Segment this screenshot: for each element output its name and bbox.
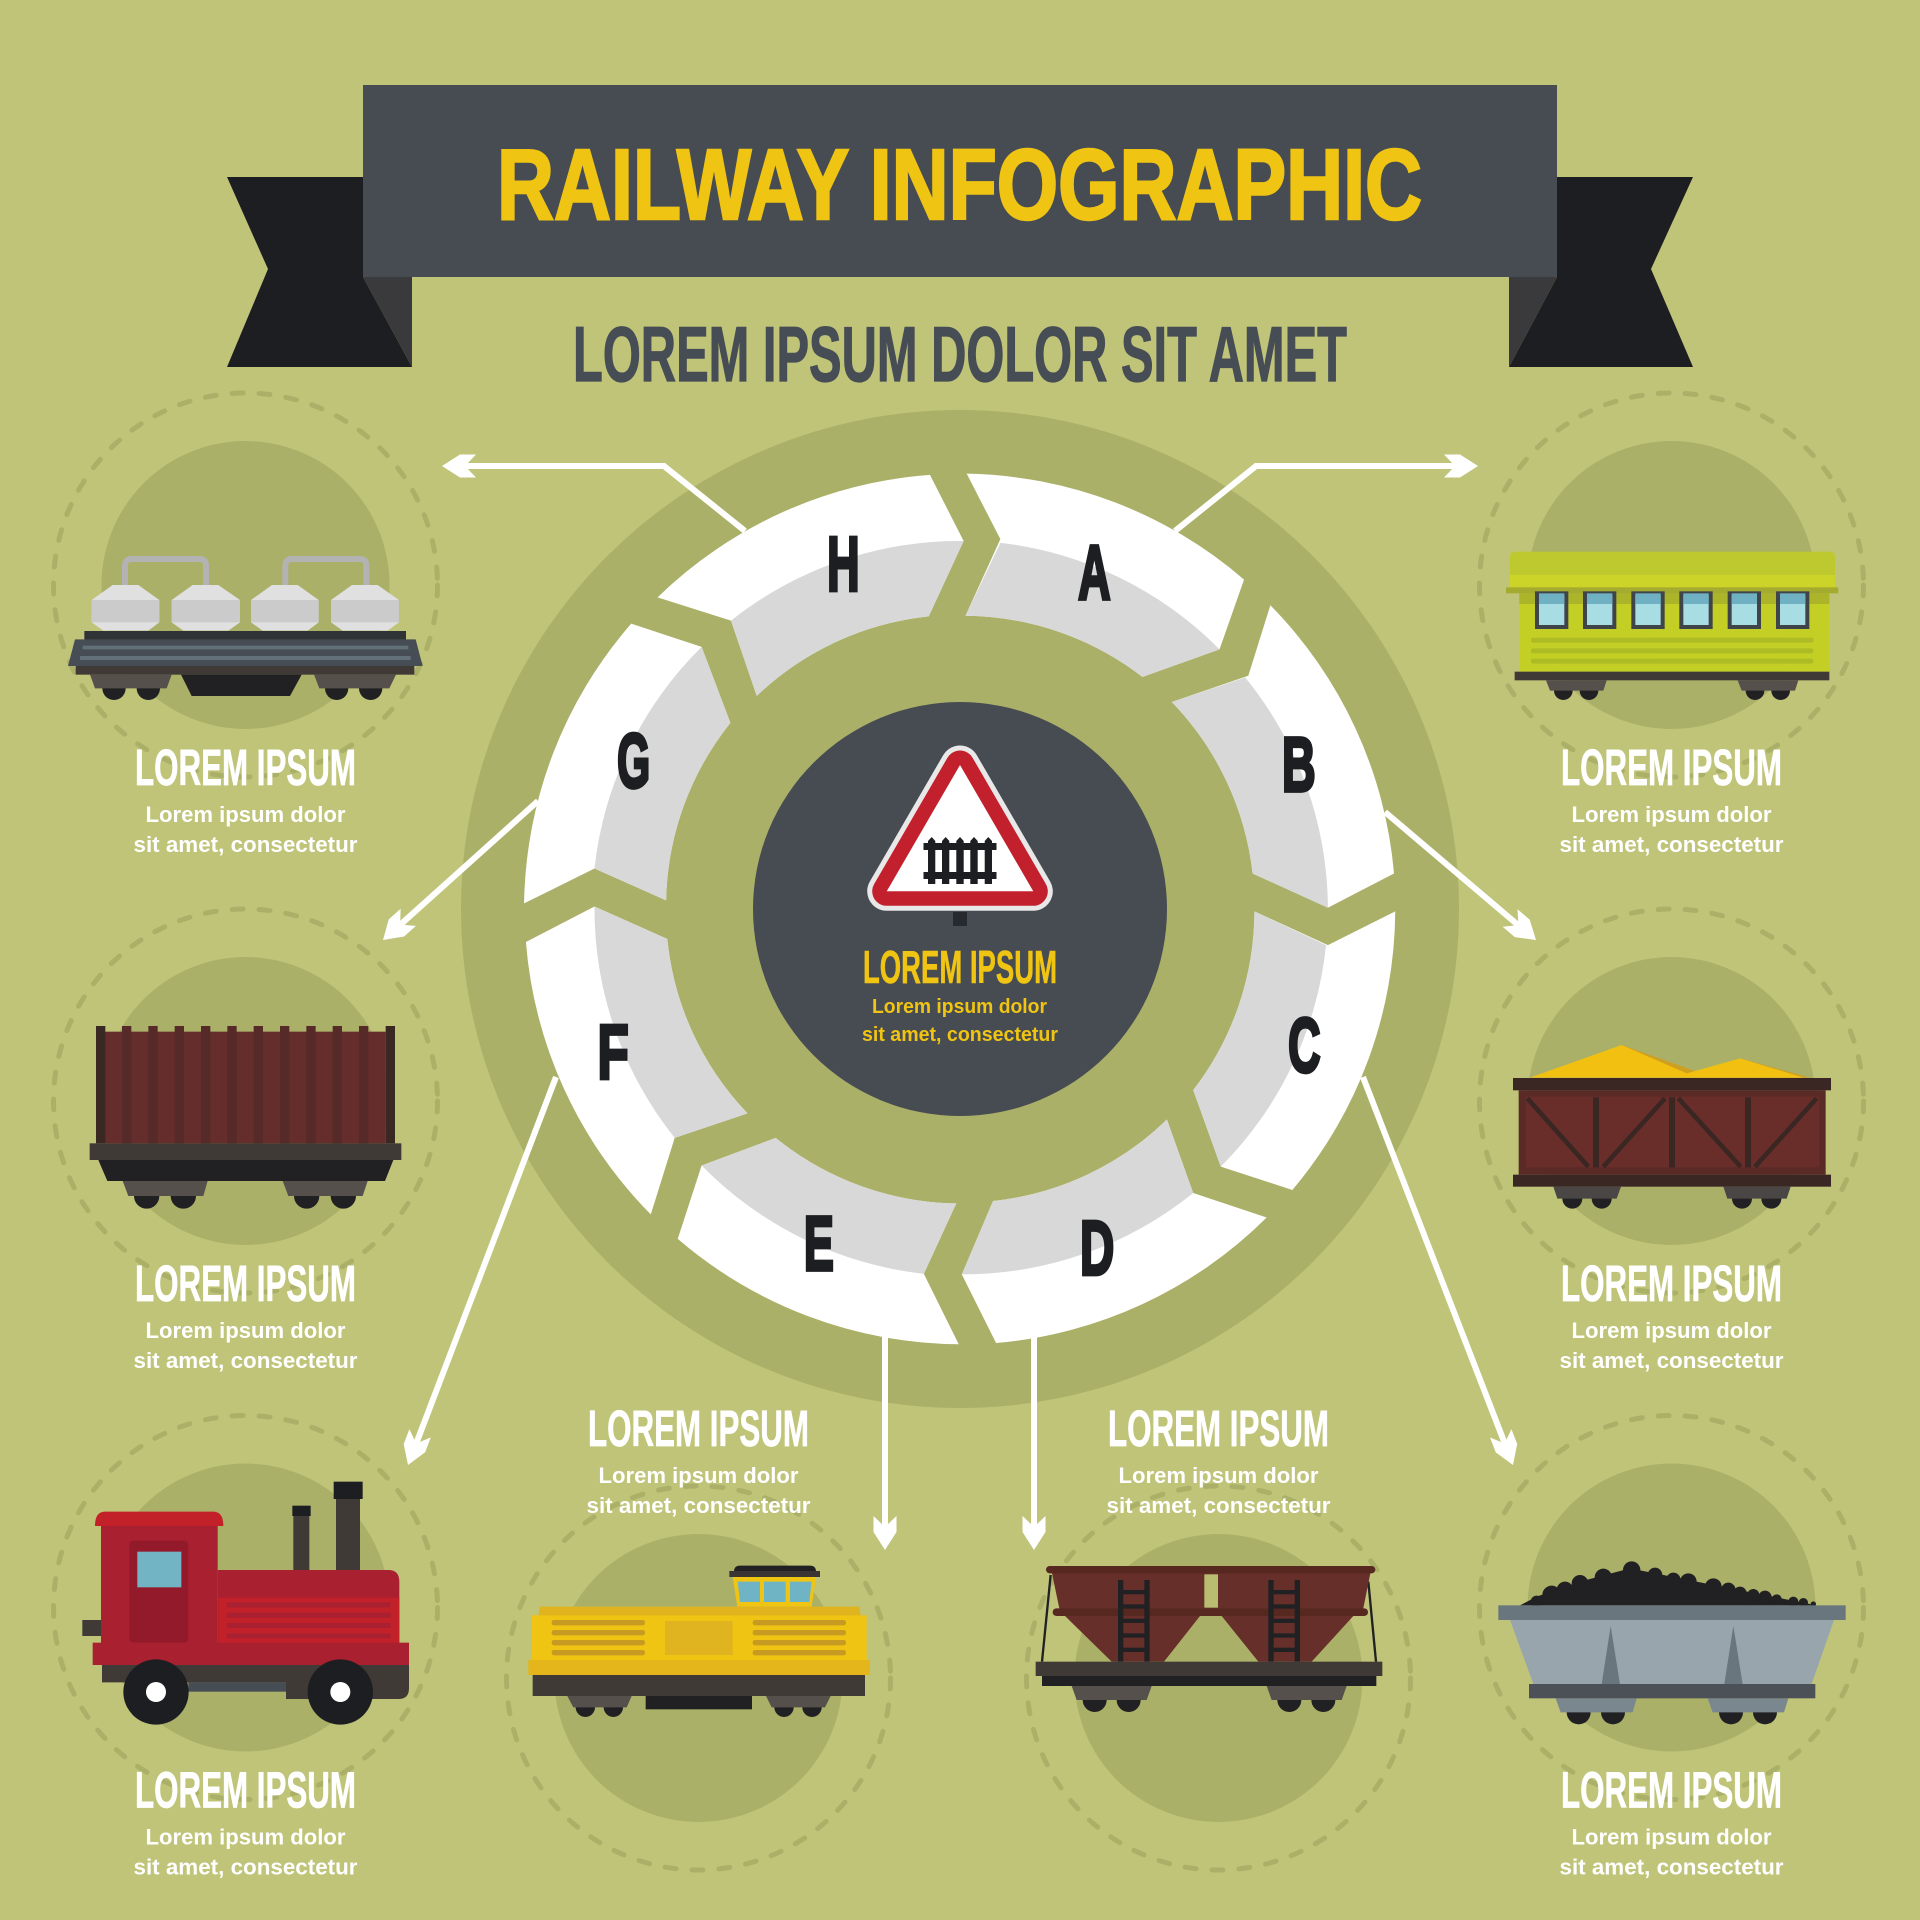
icon: hopper wagon — [1036, 1566, 1382, 1712]
segment H: H — [827, 522, 860, 608]
arrow: E — [874, 1335, 896, 1550]
text: sit amet, consectetur — [134, 1348, 358, 1373]
panel: C coal wagon — [1480, 1416, 1864, 1880]
arrow: B — [1385, 812, 1543, 949]
panel: G gondola wagon — [54, 909, 438, 1373]
banner body — [363, 85, 1557, 277]
segment C: C — [1288, 1003, 1321, 1089]
text — [586, 1463, 811, 1518]
arrow: H — [442, 454, 745, 531]
icon: coal wagon — [1498, 1561, 1846, 1724]
text: sit amet, consectetur — [586, 1493, 811, 1518]
text — [1560, 1318, 1784, 1373]
segment G: G — [617, 719, 650, 805]
label: LOREM IPSUM — [588, 1400, 809, 1457]
label: LOREM IPSUM — [135, 739, 356, 796]
title: RAILWAY INFOGRAPHIC — [497, 129, 1422, 241]
segment F — [526, 906, 748, 1214]
text: Lorem ipsum dolor — [146, 1318, 346, 1343]
segment A: A — [1078, 530, 1111, 616]
text: Lorem ipsum dolor — [146, 802, 346, 827]
panel: centre hub — [753, 702, 1167, 1116]
text: Lorem ipsum dolor — [1118, 1463, 1319, 1488]
segment F: F — [598, 1010, 629, 1096]
right ribbon fold — [1509, 277, 1557, 367]
text — [1560, 802, 1784, 857]
icon: red locomotive — [82, 1482, 409, 1725]
icon: yellow locomotive — [528, 1566, 870, 1717]
hub text — [862, 996, 1058, 1046]
panel: D hopper wagon — [1026, 1400, 1410, 1870]
text: Lorem ipsum dolor — [1572, 802, 1772, 827]
icon: wagon with yellow load — [1513, 1045, 1831, 1209]
segment H — [658, 475, 964, 696]
left ribbon tail — [227, 177, 412, 367]
panel: F red locomotive — [54, 1416, 438, 1880]
text: sit amet, consectetur — [1106, 1493, 1331, 1518]
segment D — [962, 1120, 1267, 1343]
text: Lorem ipsum dolor — [146, 1824, 346, 1850]
arrows from wheel to panels — [375, 454, 1543, 1550]
segment B — [1172, 605, 1394, 908]
text: Lorem ipsum dolor — [1572, 1318, 1772, 1343]
segmented wheel A to H — [524, 474, 1395, 1344]
arrow: G — [375, 801, 538, 949]
hub text: Lorem ipsum dolor — [872, 996, 1047, 1018]
hub circle — [753, 702, 1167, 1116]
segment B: B — [1282, 722, 1316, 808]
panel: E yellow diesel locomotive — [506, 1400, 890, 1870]
panel: A passenger carriage — [1480, 393, 1864, 857]
arrow: A — [1175, 454, 1478, 531]
arrow: D — [1022, 1335, 1046, 1550]
segment D: D — [1080, 1205, 1114, 1291]
text: Lorem ipsum dolor — [598, 1463, 799, 1488]
icon: flat wagon with silos — [68, 559, 423, 700]
hub text: sit amet, consectetur — [862, 1024, 1058, 1046]
icon: green carriage — [1506, 552, 1838, 700]
label: LOREM IPSUM — [1561, 1762, 1782, 1818]
text: Lorem ipsum dolor — [1572, 1824, 1772, 1850]
panel: H powder wagon — [54, 393, 438, 857]
panel: B ore wagon — [1480, 909, 1864, 1373]
panel: large background circle — [461, 410, 1459, 1408]
panel: title banner — [227, 85, 1693, 367]
text — [134, 1318, 358, 1373]
right ribbon tail — [1509, 177, 1693, 367]
icon: railway crossing sign — [887, 765, 1033, 926]
text: sit amet, consectetur — [134, 832, 358, 857]
text: sit amet, consectetur — [1560, 1348, 1784, 1373]
text — [1106, 1463, 1331, 1518]
segment G — [524, 624, 730, 903]
hub heading: LOREM IPSUM — [863, 941, 1057, 993]
label: LOREM IPSUM — [135, 1255, 356, 1312]
label: LOREM IPSUM — [1561, 739, 1782, 796]
label: LOREM IPSUM — [1561, 1255, 1782, 1312]
text — [134, 802, 358, 857]
segment A — [965, 474, 1244, 677]
arrow: C — [1363, 1077, 1524, 1469]
segment E: E — [804, 1201, 834, 1287]
label: LOREM IPSUM — [135, 1762, 356, 1818]
text: sit amet, consectetur — [1560, 832, 1784, 857]
segment C — [1193, 911, 1395, 1190]
text — [1560, 1824, 1784, 1880]
segment E — [678, 1138, 959, 1344]
text — [134, 1824, 358, 1880]
subtitle: LOREM IPSUM DOLOR SIT AMET — [573, 310, 1347, 398]
arrow: F — [397, 1077, 556, 1469]
text: sit amet, consectetur — [134, 1854, 358, 1880]
icon: brown gondola — [90, 1026, 401, 1209]
left ribbon fold — [363, 277, 412, 367]
text: sit amet, consectetur — [1560, 1854, 1784, 1880]
label: LOREM IPSUM — [1108, 1400, 1329, 1457]
